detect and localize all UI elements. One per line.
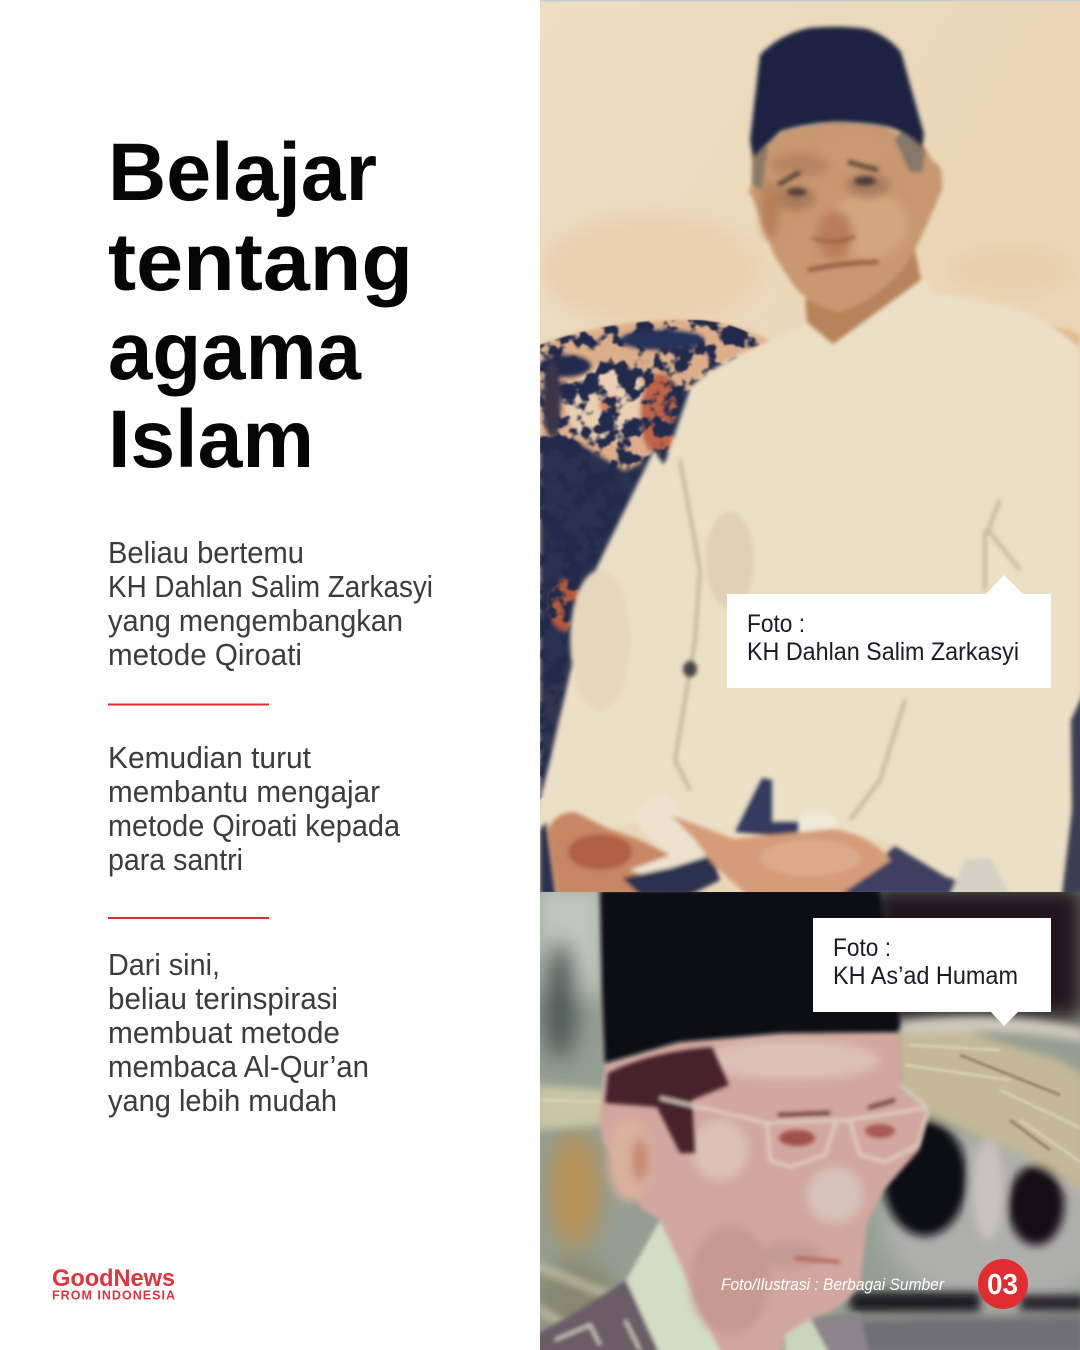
straw band right — [895, 1030, 1080, 1195]
text block: meeting KH Dahlan: Beliau bertemu — [108, 535, 304, 570]
face — [749, 122, 942, 312]
text block: inspiration: Dari sini, — [108, 947, 220, 982]
mouth — [795, 1258, 840, 1262]
title: Islam — [108, 394, 314, 485]
text block: meeting KH Dahlan: KH Dahlan Salim Zarkasyi — [108, 569, 433, 604]
sofa cushion — [540, 318, 769, 474]
logo: GoodNews from Indonesia: FROM INDONESIA — [52, 1288, 175, 1302]
cap — [600, 888, 900, 1063]
title: agama — [108, 306, 362, 397]
shirt folds — [675, 460, 1020, 820]
text block: meeting KH Dahlan: metode Qiroati — [108, 637, 302, 672]
cap — [750, 27, 924, 158]
title — [108, 127, 413, 485]
photo: KH Dahlan Salim Zarkasyi — [539, 0, 1080, 895]
text block: inspiration: beliau terinspirasi — [108, 981, 338, 1016]
text block: inspiration — [108, 947, 369, 1118]
text block: helping teach: metode Qiroati kepada — [108, 808, 401, 843]
cushion navy blobs — [539, 355, 591, 377]
neck — [805, 250, 921, 344]
shirt — [540, 275, 1080, 892]
page number badge — [978, 1259, 1028, 1309]
wheel holes — [883, 1120, 967, 1236]
collar — [626, 1220, 722, 1350]
callout: KH Dahlan Salim Zarkasyi: Foto : — [747, 610, 805, 638]
right hand — [671, 815, 891, 895]
callout: KH As'ad Humam: Foto : — [833, 934, 891, 962]
straw band left — [535, 1085, 610, 1130]
logo: GoodNews from Indonesia: GoodNews — [52, 1265, 175, 1292]
text block: meeting KH Dahlan — [108, 535, 433, 672]
text block: helping teach: para santri — [108, 842, 243, 877]
text block: helping teach: membantu mengajar — [108, 774, 380, 809]
text block: helping teach — [108, 740, 401, 877]
text block: meeting KH Dahlan: yang mengembangkan — [108, 603, 403, 638]
text block: inspiration: membaca Al-Qur’an — [108, 1049, 369, 1084]
eyes — [779, 1130, 815, 1146]
photo credit: Foto/Ilustrasi : Berbagai Sumber — [721, 1275, 945, 1294]
text block: helping teach: Kemudian turut — [108, 740, 311, 775]
hair — [895, 130, 925, 172]
glasses — [660, 1085, 928, 1167]
shirt — [535, 1280, 662, 1350]
neck and face — [600, 1030, 929, 1350]
hair — [605, 1047, 729, 1153]
callout: KH As'ad Humam: KH As’ad Humam — [833, 962, 1018, 990]
title: tentang — [108, 217, 413, 308]
lap sarong — [840, 846, 1005, 895]
cushion pattern — [540, 320, 760, 800]
text block: inspiration: yang lebih mudah — [108, 1083, 337, 1118]
page number badge: 03 — [987, 1269, 1018, 1301]
photo: KH As'ad Humam — [535, 885, 1080, 1350]
callout: KH Dahlan Salim Zarkasyi — [727, 575, 1051, 688]
eyes and mouth — [778, 162, 878, 185]
straw streaks — [540, 1045, 1080, 1165]
bottom shadow — [850, 1292, 980, 1312]
left hand — [548, 812, 695, 895]
title: Belajar — [108, 127, 377, 218]
callout: KH As'ad Humam — [813, 918, 1051, 1026]
cloth between hands — [630, 790, 712, 885]
callout: KH Dahlan Salim Zarkasyi: KH Dahlan Salim Zarkasyi — [747, 638, 1019, 666]
text block: inspiration: membuat metode — [108, 1015, 340, 1050]
